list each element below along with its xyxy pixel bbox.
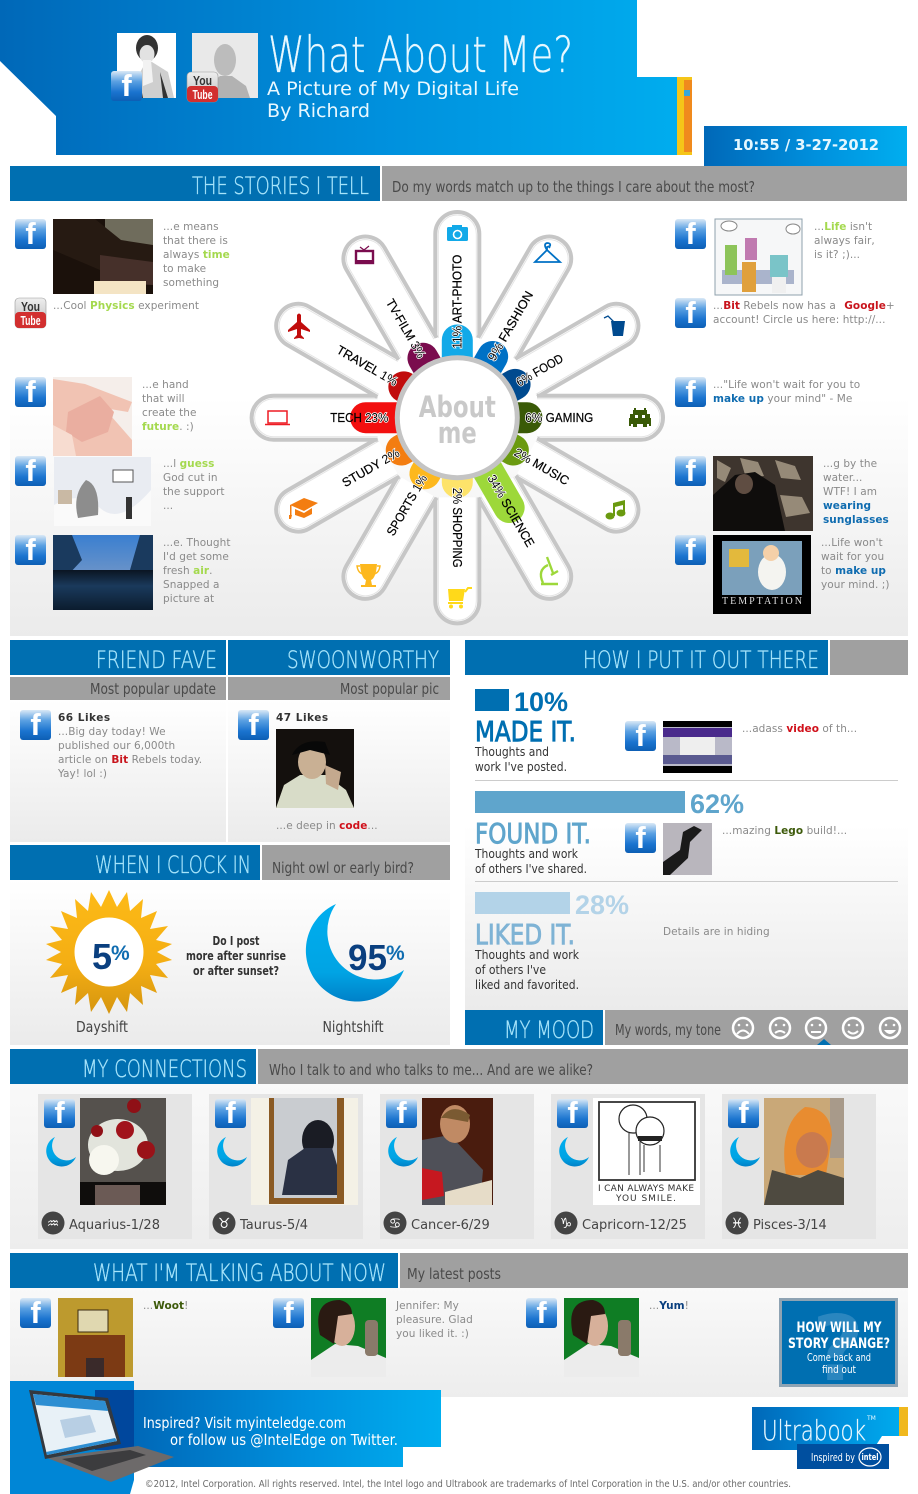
story: future: future. :)	[142, 421, 194, 433]
connection: capricorn: Capricorn-12/25	[582, 1218, 687, 1233]
subtitle	[267, 78, 519, 122]
heading: the stories i tell	[10, 166, 380, 201]
subheading: empty grey bar	[830, 640, 908, 675]
heading: how i put it out there	[465, 640, 828, 675]
icon: trophy	[357, 564, 380, 587]
panel: friend fave: f	[30, 707, 41, 742]
icon: music note	[606, 500, 626, 520]
story: temptation: TEMPTATION	[722, 596, 802, 607]
ultrabook logo: Ultrabook	[762, 1414, 866, 1447]
made it: ...adass video of th...	[742, 723, 857, 735]
subheading: stories: Do my words match up to the things I care about the most?	[392, 178, 755, 196]
story: air: f	[25, 532, 36, 567]
subheading: most popular update: Most popular update	[90, 680, 216, 698]
story: air: I'd get some	[163, 551, 229, 563]
story: sunglasses: ...g by the	[823, 458, 877, 470]
subheading: my words, my tone: My words, my tone	[615, 1021, 721, 1039]
subheading: most popular pic: Most popular pic	[340, 680, 439, 698]
story: physics: Tube	[20, 313, 40, 328]
story: guess: God cut in	[163, 472, 218, 484]
panel: friend fave: Yay! lol :)	[57, 768, 107, 780]
story: make up: make up your mind" - Me	[713, 393, 852, 405]
subheading: my latest posts: My latest posts	[407, 1265, 501, 1283]
sunrise or sunset question: more after sunrise	[186, 949, 286, 963]
icon: facebook	[111, 68, 142, 103]
laptop illustration	[29, 1390, 174, 1482]
category labels: 2% SHOPPING	[450, 488, 464, 568]
mood faces	[733, 1018, 900, 1038]
connection: aquarius	[38, 1094, 192, 1239]
connection: aquarius: f	[54, 1095, 65, 1130]
connection: capricorn: I CAN ALWAYS MAKE	[598, 1184, 694, 1194]
liked it: Thoughts and work	[474, 948, 579, 962]
heading: what i'm talking about now	[10, 1253, 398, 1288]
centre hub: About	[419, 390, 496, 424]
story: google plus: account! Circle us here: http://...	[713, 314, 885, 326]
story: air: ...e. Thought	[163, 537, 231, 549]
subheading: my words, my tone	[605, 1010, 908, 1045]
story: time: f	[25, 216, 36, 251]
story: google plus	[675, 295, 895, 330]
panel: swoonworthy: ...e deep in code...	[276, 820, 378, 832]
icon: microscope	[541, 557, 558, 584]
connection: taurus: ♉︎	[218, 1216, 230, 1232]
footer banner: or follow us @IntelEdge on Twitter.	[170, 1431, 398, 1449]
footer blue block	[10, 1381, 134, 1494]
subheading: stories	[382, 166, 907, 201]
story: sunglasses: sunglasses	[823, 514, 889, 526]
chart: about me wheel	[252, 212, 663, 623]
category labels: 9% FASHION	[485, 289, 536, 363]
profile photo	[117, 33, 176, 98]
story: guess: f	[25, 453, 36, 488]
icon: very sad face	[733, 1018, 753, 1038]
icon: sun 5%: %	[111, 942, 130, 965]
title: What About Me?	[268, 26, 573, 84]
icon: facebook: f	[121, 68, 132, 103]
centre hub	[397, 358, 517, 478]
connection: cancer: Cancer-6/29	[411, 1218, 490, 1233]
heading: when i clock in: WHEN I CLOCK IN	[95, 851, 251, 879]
subheading: night owl	[262, 845, 450, 880]
panel: talking background	[10, 1288, 908, 1397]
story: physics: ...Cool Physics experiment	[53, 300, 199, 312]
connection: taurus	[209, 1094, 363, 1239]
found it	[474, 789, 847, 876]
story: guess: ...	[163, 500, 173, 512]
story: physics	[15, 298, 199, 328]
icon: happy face	[843, 1018, 863, 1038]
made it: f	[635, 718, 646, 753]
icon: neutral face	[806, 1018, 826, 1038]
panel: friend fave: 66 Likes	[58, 712, 111, 724]
category labels: SPORTS 1%	[384, 472, 430, 538]
found it: 62%	[690, 789, 744, 819]
heading: what i'm talking about now: WHAT I'M TALKING ABOUT NOW	[93, 1259, 386, 1287]
post: woot: f	[30, 1295, 41, 1330]
heading: my mood: MY MOOD	[504, 1016, 594, 1044]
story: life: always fair,	[814, 235, 875, 247]
story: air: picture at	[163, 593, 214, 605]
icon: moon 95%	[306, 904, 405, 1002]
subheading: my latest posts	[400, 1253, 908, 1288]
petal outlines	[252, 212, 663, 623]
ultrabook logo: TM	[866, 1415, 876, 1422]
post: jennifer: f	[283, 1295, 294, 1330]
icon: hanger	[535, 243, 560, 262]
panel: the stories background	[10, 201, 908, 636]
icon: camera	[447, 225, 468, 241]
post: jennifer: you liked it. :)	[396, 1328, 469, 1340]
story: time	[15, 216, 230, 294]
story: life: ...Life isn't	[814, 221, 872, 233]
subtitle: A Picture of My Digital Life	[267, 78, 519, 100]
story: temptation: your mind. ;)	[821, 579, 890, 591]
heading: how i put it out there: HOW I PUT IT OUT THERE	[583, 646, 819, 674]
found it: Thoughts and work	[474, 847, 578, 861]
subheading: connections: Who I talk to and who talks to me... And are we alike?	[269, 1061, 593, 1079]
subtitle: By Richard	[267, 100, 370, 122]
panel: friend fave: ...Big day today! We	[58, 726, 166, 738]
story: air: Snapped a	[163, 579, 220, 591]
centre hub: me	[438, 416, 477, 450]
category labels	[330, 254, 593, 568]
made it	[474, 687, 857, 774]
icon: sad face	[770, 1018, 790, 1038]
subheading: connections	[258, 1049, 908, 1084]
header banner	[0, 0, 692, 155]
panel: friend fave: article on Bit Rebels today.	[58, 754, 202, 766]
story: temptation: f	[685, 532, 696, 567]
connection: taurus: f	[225, 1095, 236, 1130]
story: temptation: wait for you	[821, 551, 884, 563]
icon: television	[355, 246, 374, 264]
post: yum	[526, 1295, 689, 1377]
callout: how will my story change: ?	[812, 1297, 864, 1402]
story: temptation	[675, 532, 890, 614]
category labels: 11% ART-PHOTO	[451, 254, 465, 349]
sunrise or sunset question: Do I post	[212, 934, 260, 948]
category labels: 6% GAMING	[525, 411, 593, 425]
story: life: f	[685, 216, 696, 251]
story: life: is it? ;)...	[814, 249, 860, 261]
post: jennifer	[273, 1295, 473, 1377]
footer banner: Inspired? Visit myinteledge.com	[143, 1414, 346, 1432]
sunrise or sunset question: or after sunset?	[193, 964, 279, 978]
liked it: of others I've	[475, 963, 546, 977]
found it: of others I've shared.	[475, 862, 587, 876]
heading: swoonworthy: SWOONWORTHY	[287, 646, 439, 674]
post: woot	[20, 1295, 188, 1377]
story: time: to make	[163, 263, 206, 275]
ultrabook logo: Inspired by	[811, 1451, 855, 1464]
ultrabook logo	[752, 1407, 908, 1469]
divider	[475, 780, 898, 781]
story: sunglasses: wearing	[823, 500, 871, 512]
connection: capricorn: f	[567, 1095, 578, 1130]
story: time: that there is	[163, 235, 228, 247]
ultrabook logo: intel	[862, 1453, 878, 1463]
icon: youtube	[187, 72, 218, 102]
connection: pisces: ♓︎	[731, 1216, 743, 1232]
story: guess: the support	[163, 486, 225, 498]
story: air	[15, 532, 231, 610]
category labels: TV-FILM 3%	[383, 297, 428, 361]
post: yum: f	[536, 1295, 547, 1330]
callout: how will my story change: Come back and	[807, 1351, 871, 1364]
copyright: ©2012, Intel Corporation. All rights reserved. Intel, the Intel logo and Ultrabook are trademarks of Intel Corporation in the U.S. and/or other countries.	[145, 1479, 791, 1490]
heading: when i clock in	[10, 845, 260, 880]
icon: moon 95%: 95	[348, 937, 387, 978]
story: temptation: ...Life won't	[821, 537, 883, 549]
mood marker	[817, 1039, 831, 1045]
found it: ...mazing Lego build!...	[722, 825, 847, 837]
connection: pisces	[722, 1094, 876, 1239]
story: sunglasses: water...	[823, 472, 862, 484]
icon: sun 5%: 5	[92, 936, 112, 977]
story: temptation: to make up	[821, 565, 886, 577]
story: future: f	[25, 374, 36, 409]
story: future	[15, 374, 196, 456]
story: time: always time	[163, 249, 230, 261]
connection: pisces: Pisces-3/14	[753, 1218, 827, 1233]
icon: youtube: Tube	[192, 87, 212, 102]
connection: taurus: Taurus-5/4	[239, 1218, 308, 1233]
connection: cancer: f	[396, 1095, 407, 1130]
divider	[475, 881, 898, 882]
story: future: ...e hand	[142, 379, 189, 391]
connection: capricorn: YOU SMILE.	[615, 1194, 676, 1204]
story: sunglasses	[675, 453, 889, 531]
subheading: night owl: Night owl or early bird?	[272, 859, 414, 877]
found it: FOUND IT.	[475, 817, 591, 850]
connection: aquarius: ♒︎	[47, 1216, 59, 1232]
heading: the stories i tell: THE STORIES I TELL	[192, 172, 369, 200]
story: make up	[675, 374, 860, 409]
made it: Thoughts and	[474, 745, 549, 759]
sunrise or sunset question	[186, 934, 286, 978]
story: make up: ..."Life won't wait for you to	[713, 379, 860, 391]
post: yum: ...Yum!	[649, 1300, 689, 1312]
heading: my connections: MY CONNECTIONS	[82, 1055, 247, 1083]
connection: aquarius: Aquarius-1/28	[69, 1218, 160, 1233]
story: time: something	[163, 277, 219, 289]
liked it: liked and favorited.	[475, 978, 579, 992]
icon: airplane	[288, 314, 310, 339]
story: guess: ...l guess	[163, 458, 214, 470]
story: future: create the	[142, 407, 196, 419]
icon: very happy face	[880, 1018, 900, 1038]
icon: drink	[604, 316, 625, 336]
subheading: most popular pic	[228, 677, 450, 700]
panel: friend fave: published our 6,000th	[58, 740, 175, 752]
callout: how will my story change: find out	[822, 1363, 857, 1376]
connection: cancer	[380, 1094, 534, 1239]
liked it: LIKED IT.	[475, 918, 575, 951]
made it: 10%	[514, 687, 568, 717]
panel: connections background	[10, 1084, 908, 1249]
panel: swoonworthy	[228, 700, 450, 842]
dayshift label: Dayshift	[76, 1018, 128, 1036]
story: sunglasses: WTF! I am	[823, 486, 877, 498]
panel: swoonworthy: f	[248, 707, 259, 742]
story: google plus: f	[685, 295, 696, 330]
story: google plus: ...Bit Rebels now has a Google+	[713, 300, 895, 312]
callout: how will my story change: STORY CHANGE?	[788, 1336, 890, 1352]
panel: friend fave	[10, 700, 226, 842]
subheading: most popular update	[10, 677, 226, 700]
youtube avatar placeholder	[192, 33, 258, 98]
icon: space invader	[629, 408, 651, 427]
story: time: ...e means	[163, 221, 219, 233]
connection: pisces: f	[738, 1095, 749, 1130]
story: make up: f	[685, 374, 696, 409]
liked it	[474, 890, 770, 992]
panel: swoonworthy: 47 Likes	[276, 712, 329, 724]
made it: work I've posted.	[475, 760, 567, 774]
nightshift label: Nightshift	[322, 1018, 384, 1036]
category labels: TRAVEL 1%	[334, 343, 400, 389]
category labels: 34% SCIENCE	[484, 472, 537, 550]
story: air: fresh air.	[163, 565, 213, 577]
icon: youtube: You	[193, 73, 212, 88]
post: jennifer: pleasure. Glad	[396, 1314, 473, 1326]
date stamp: 10:55 / 3-27-2012	[733, 136, 879, 154]
icon: laptop	[265, 411, 290, 424]
date stamp	[704, 126, 907, 166]
found it: f	[635, 820, 646, 855]
footer banner	[95, 1390, 441, 1467]
story: physics: You	[21, 299, 40, 314]
connection: capricorn: ♑︎	[560, 1216, 572, 1232]
heading: friend fave: FRIEND FAVE	[96, 646, 217, 674]
icon: graduation cap	[289, 498, 318, 519]
connection: cancer: ♋︎	[389, 1216, 401, 1232]
liked it: Details are in hiding	[663, 926, 770, 938]
liked it: 28%	[575, 890, 629, 920]
story: guess	[15, 453, 225, 526]
made it: MADE IT.	[475, 715, 576, 748]
story: future: that will	[142, 393, 185, 405]
category labels: TECH 23%	[330, 411, 388, 425]
heading: my mood	[465, 1010, 603, 1045]
category labels: 2% MUSIC	[512, 445, 572, 488]
heading: my connections	[10, 1049, 256, 1084]
category labels: 6% FOOD	[514, 351, 566, 390]
connection: capricorn	[551, 1094, 705, 1239]
story: sunglasses: f	[685, 453, 696, 488]
post: jennifer: Jennifer: My	[395, 1300, 459, 1312]
panel: when i clock in	[10, 880, 450, 1045]
callout: how will my story change	[780, 1297, 896, 1402]
panel: how i put it out there	[465, 675, 908, 1010]
post: woot: ...Woot!	[143, 1300, 188, 1312]
icon: sun 5%	[46, 890, 172, 1014]
heading: friend fave	[10, 640, 226, 675]
heading: swoonworthy	[228, 640, 450, 675]
icon: moon 95%: %	[386, 942, 405, 965]
category labels: STUDY 2%	[340, 446, 402, 490]
callout: how will my story change: HOW WILL MY	[796, 1320, 882, 1336]
story: life	[675, 216, 875, 295]
coloured share bars	[350, 324, 542, 529]
icon: shopping cart	[448, 588, 472, 608]
